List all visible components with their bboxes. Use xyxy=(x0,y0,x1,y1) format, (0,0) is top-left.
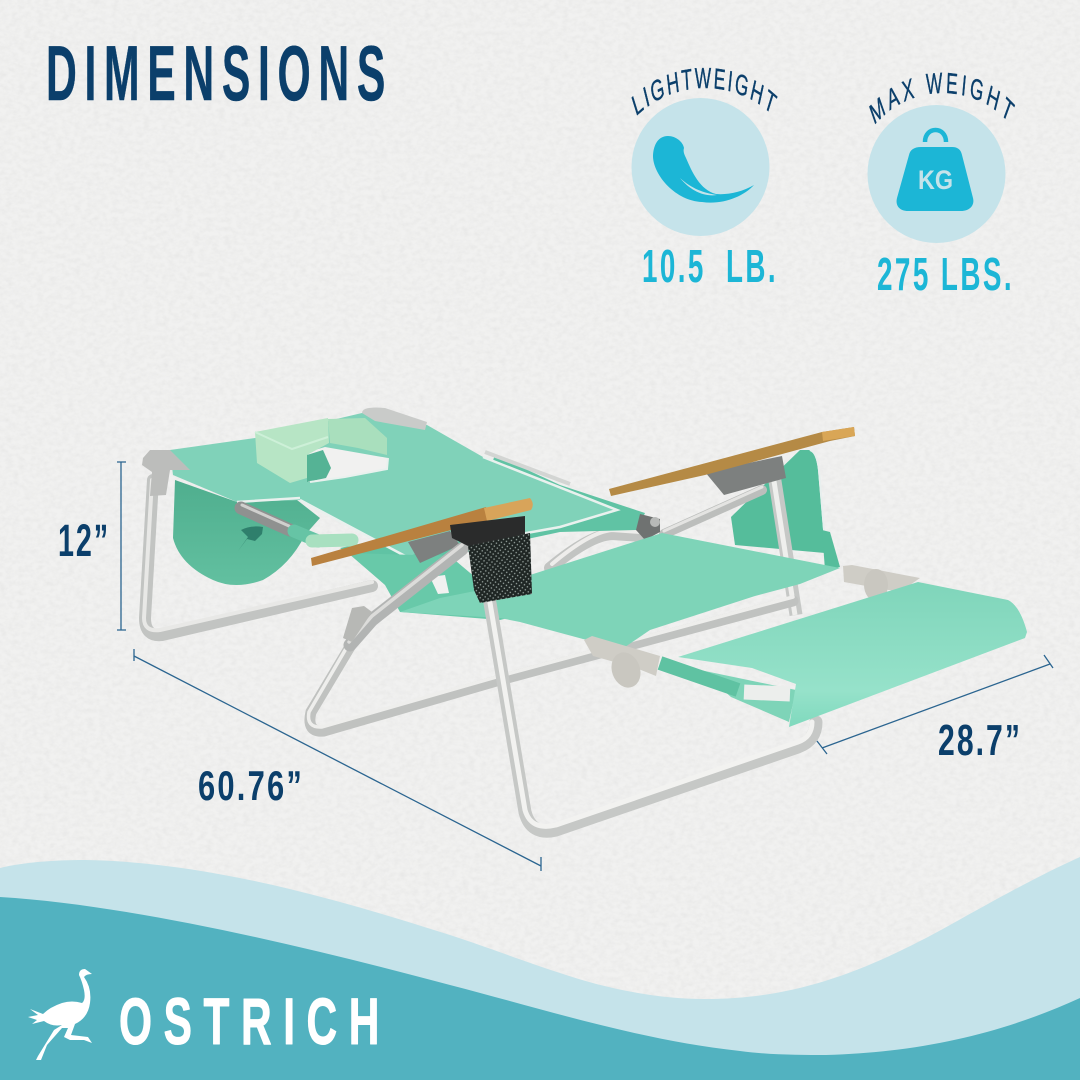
width label: 28.7” xyxy=(938,716,1022,765)
dark wave xyxy=(0,897,1080,1080)
right armrest bracket xyxy=(705,456,786,495)
face pillow xyxy=(255,418,387,483)
hinge xyxy=(636,514,660,540)
left arm bracket xyxy=(408,531,460,563)
dimension: width xyxy=(817,655,1053,765)
pouch xyxy=(173,480,320,585)
footrest sleeve xyxy=(660,663,738,690)
dimension: length xyxy=(134,649,541,871)
right armrest post xyxy=(771,462,796,615)
face hole xyxy=(307,447,388,482)
upper rail xyxy=(485,452,570,484)
under seat fabric xyxy=(348,553,520,620)
pouch logo xyxy=(238,526,263,551)
stat: lightweight xyxy=(632,68,778,292)
white gap xyxy=(430,575,449,594)
dimension: height xyxy=(58,462,126,630)
front hinge xyxy=(584,636,660,692)
height label: 12” xyxy=(58,515,110,566)
height line xyxy=(117,462,126,630)
title: DIMENSIONS xyxy=(46,29,393,117)
top left hardware xyxy=(142,450,190,496)
lightweight arc label: LIGHTWEIGHT xyxy=(632,68,778,116)
back panel white edge xyxy=(237,457,617,557)
chair photo illustration xyxy=(142,408,1027,831)
rear middle rail xyxy=(309,543,793,731)
ostrich icon xyxy=(28,969,92,1060)
max weight circle xyxy=(868,105,1006,243)
lightweight circle xyxy=(632,98,770,236)
right hinge xyxy=(843,565,920,601)
length label: 60.76” xyxy=(198,762,304,809)
mesh pocket xyxy=(468,533,532,603)
rear leg frame xyxy=(144,480,372,635)
brand logo xyxy=(28,969,391,1060)
diagonal hardware xyxy=(343,606,372,642)
light wave xyxy=(0,857,1080,1080)
cup holder xyxy=(450,516,532,603)
icon: kettle weight xyxy=(897,130,973,211)
rear strip of fabric xyxy=(340,455,645,556)
backrest on right xyxy=(731,450,840,570)
max weight arc label: MAX WEIGHT xyxy=(869,72,1016,124)
right support diagonal and curved tube xyxy=(550,487,762,568)
icon: feather xyxy=(653,136,754,203)
width line xyxy=(817,655,1053,754)
length line xyxy=(134,649,541,871)
wordmark: OSTRICH xyxy=(119,984,391,1058)
front leg frame xyxy=(490,603,816,831)
stat: max weight xyxy=(868,72,1016,300)
footrest fabric xyxy=(678,582,1027,727)
diagonal arm support xyxy=(349,545,462,645)
left bamboo armrest xyxy=(311,498,533,566)
right bamboo armrest xyxy=(609,427,855,496)
icon: kettle weight: KG xyxy=(918,165,953,195)
side handle tube xyxy=(241,505,352,541)
head support tray xyxy=(362,408,427,430)
lightweight value: 10.5 LB. xyxy=(642,240,778,292)
seat fabric xyxy=(400,533,840,647)
back panel fabric xyxy=(170,413,617,557)
footrest tube xyxy=(744,692,790,694)
footrest underside xyxy=(700,670,796,722)
